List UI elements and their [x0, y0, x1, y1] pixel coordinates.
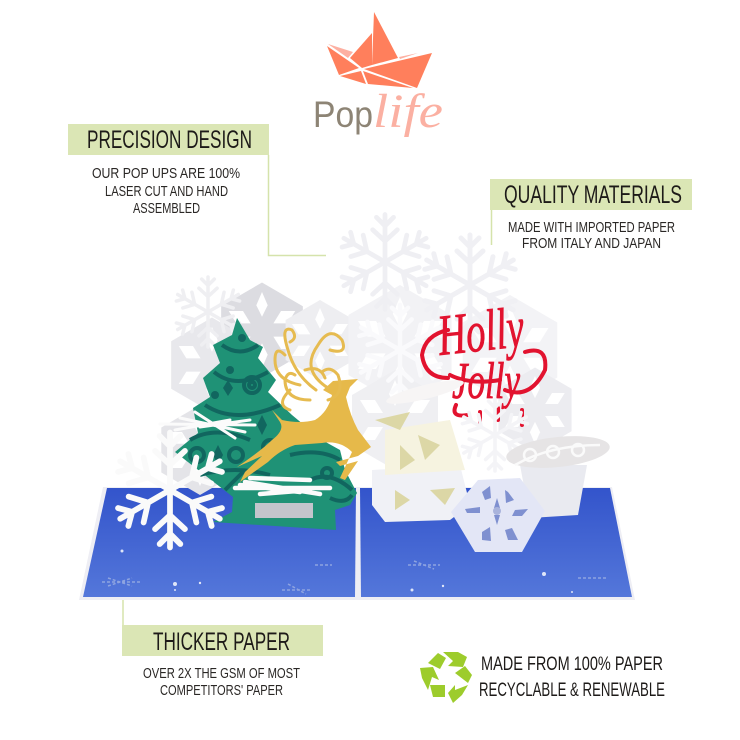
callout: quality materials: FROM ITALY AND JAPAN — [522, 236, 661, 252]
snow on tree — [160, 412, 330, 494]
Holly Jolly red lettering: Jolly — [452, 353, 521, 410]
cut paper boxes: right — [372, 412, 587, 522]
callout: precision design: OUR POP UPS ARE 100% — [92, 166, 240, 182]
Christmas tree — [175, 318, 357, 530]
callout: thicker paper: OVER 2X THE GSM OF MOST — [143, 666, 300, 682]
recyclable note: RECYCLABLE & RENEWABLE — [479, 680, 665, 701]
Holly Jolly red lettering — [422, 294, 545, 425]
callout: precision design: ASSEMBLED — [133, 201, 200, 217]
callout: quality materials: MADE WITH IMPORTED PAPER — [508, 220, 675, 236]
callout: thicker paper: COMPETITORS' PAPER — [160, 683, 283, 699]
white snowflakes and oval flake: right — [384, 376, 611, 472]
callout: precision design: PRECISION DESIGN — [87, 126, 252, 154]
paper snowflakes: back layer — [161, 214, 572, 495]
card base: blue panels — [79, 487, 635, 600]
callout: quality materials — [490, 179, 692, 252]
callout: thicker paper: THICKER PAPER — [153, 628, 290, 656]
icon: recycling arrows — [420, 652, 472, 703]
pop up card photo — [79, 214, 635, 600]
callout: thicker paper — [122, 625, 323, 699]
logo: Poplife paper boat: life — [373, 85, 443, 138]
Holly Jolly red lettering: Holly — [434, 294, 527, 368]
recyclable note: MADE FROM 100% PAPER — [481, 654, 663, 675]
recyclable note — [479, 654, 665, 701]
snowflake lower left — [113, 432, 227, 548]
logo: Poplife paper boat: Pop — [313, 94, 373, 135]
callout: precision design — [68, 124, 269, 217]
reindeer — [237, 329, 371, 482]
hexagon snowflake: front — [451, 478, 545, 552]
callout: precision design: LASER CUT AND HAND — [105, 184, 228, 200]
leader lines — [123, 155, 492, 626]
logo: Poplife paper boat — [313, 12, 443, 138]
